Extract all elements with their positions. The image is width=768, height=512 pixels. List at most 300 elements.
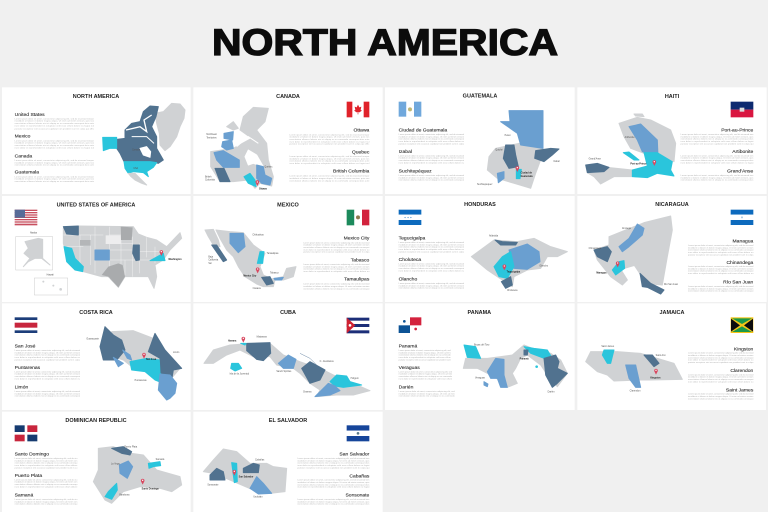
text blocks: irure dolor in reprehenderit in voluptate velit esse cillum dolore eu bbox=[303, 270, 370, 273]
text block: guatemala: incididunt ut labore et dolore magna aliqua. Ut enim ad minim veniam, quis nos bbox=[15, 178, 94, 181]
text block: mexico bbox=[15, 134, 95, 149]
text blocks: irure dolor in reprehenderit in voluptate velit esse cillum dolore eu bbox=[303, 248, 370, 251]
text blocks: irure dolor in reprehenderit in voluptate velit esse cillum dolore eu bbox=[688, 359, 754, 362]
map: cuba: Holguín bbox=[351, 378, 359, 380]
panel: honduras bbox=[385, 196, 575, 302]
text blocks: irure dolor in reprehenderit in voluptate velit esse cillum dolore bbox=[15, 464, 78, 467]
map: nicaragua: Jinotega bbox=[622, 227, 632, 230]
text blocks: incididunt ut labore et dolore magna aliqua. Ut enim ad minim veniam, quis nos bbox=[289, 177, 369, 180]
text block: united states: irure dolor in reprehenderit in voluptate velit esse cillum dolore eu fugiat nul bbox=[15, 124, 95, 127]
map: el salvador: Cabañas bbox=[255, 458, 265, 461]
text blocks: exercitation ullamco laboris nisi ut aliquip ex ea commodo consequat duis aute bbox=[289, 160, 370, 163]
text blocks: pariatur excepteur sint occaecat cupidatat non proident sunt in culpa qui bbox=[297, 466, 370, 469]
map: dominican republic: La Vega bbox=[111, 464, 120, 466]
text blocks: incididunt ut labore et dolore magna aliqua. Ut enim ad minim veniam bbox=[303, 244, 370, 247]
text blocks: incididunt ut labore et dolore magna aliqua. Ut enim ad minim veniam, quis bbox=[297, 500, 369, 503]
text blocks: Lorem ipsum dolor sit amet, consectetur adipiscing elit, sed do eiusmod bbox=[688, 244, 754, 247]
panel: canada bbox=[193, 87, 383, 194]
text blocks: exercitation ullamco laboris nisi ut aliquip ex ea commodo consequat bbox=[303, 287, 370, 290]
text blocks: Lorem ipsum dolor sit amet, consectetur adipiscing elit, sed do eiu bbox=[15, 498, 78, 501]
text block: guatemala: exercitation ullamco laboris nisi ut aliquip ex ea commodo consequat duis aute bbox=[15, 180, 95, 183]
map: usa: Washington bbox=[168, 258, 182, 261]
text blocks: irure dolor in reprehenderit in voluptate velit esse cillum dolore eu bbox=[399, 140, 465, 143]
flag: haiti bbox=[731, 102, 753, 117]
map: costa rica: San José bbox=[146, 359, 157, 361]
map: dominican republic: Samaná bbox=[156, 459, 165, 461]
map: el salvador bbox=[203, 449, 287, 499]
heading: MEXICO bbox=[277, 202, 300, 208]
map: nicaragua: Chinandega bbox=[589, 248, 602, 250]
text blocks: Managua bbox=[733, 238, 754, 244]
panel: dominican republic bbox=[2, 412, 191, 512]
text blocks: exercitation ullamco laboris nisi ut aliquip ex ea commodo bbox=[399, 395, 455, 398]
map: mexico: Sur bbox=[208, 262, 212, 265]
text blocks: pariatur excepteur sint occaecat cupidatat non proident sunt bbox=[399, 358, 451, 361]
text blocks: exercitation ullamco laboris nisi ut aliquip ex ea commodo consequat bbox=[688, 397, 754, 400]
text blocks bbox=[681, 128, 754, 182]
text blocks: Ottawa bbox=[354, 128, 370, 134]
text blocks: incididunt ut labore et dolore magna aliqua. Ut enim ad minim veniam, quis bbox=[681, 176, 753, 179]
map: guatemala: Quiché bbox=[495, 150, 503, 152]
text blocks: irure dolor in reprehenderit in voluptate velit esse cillum dolore eu fugiat bbox=[297, 464, 370, 467]
text blocks: Ciudad de Guatemala bbox=[399, 128, 447, 134]
text blocks: exercitation ullamco laboris nisi ut aliquip ex ea commodo bbox=[399, 375, 453, 378]
text blocks: Lorem ipsum dolor sit amet, consectetur adipiscing elit, sed do eiusmod bbox=[688, 265, 754, 268]
text blocks: incididunt ut labore et dolore magna aliqua. Ut enim ad minim veniam, quis bbox=[681, 135, 753, 138]
text blocks: incididunt ut labore et dolore magna aliqua. Ut enim ad minim veniam bbox=[399, 157, 464, 160]
text blocks: Kingston bbox=[734, 346, 754, 352]
text block: canada: Lorem ipsum dolor sit amet, consectetur adipiscing elit, sed do eiusmod tempor bbox=[15, 159, 94, 162]
map: panama: Darién bbox=[548, 390, 555, 393]
map: north america bbox=[103, 103, 185, 185]
text blocks: incididunt ut labore et dolore magna aliqua. Ut enim ad minim veniam, quis bbox=[297, 459, 369, 462]
text blocks: exercitation ullamco laboris nisi ut aliquip ex ea commodo consequat bbox=[399, 287, 464, 290]
text blocks bbox=[399, 344, 455, 398]
text blocks: Choluteca bbox=[399, 257, 421, 263]
panel: haiti bbox=[577, 87, 767, 194]
heading: JAMAICA bbox=[659, 310, 685, 316]
text blocks: Lorem ipsum dolor sit amet, consectetur adipiscing elit, sed do eiusmod bbox=[688, 393, 754, 396]
text blocks: exercitation ullamco laboris nisi ut aliquip ex ea commodo consequat bbox=[15, 354, 80, 357]
text blocks: exercitation ullamco laboris nisi ut aliquip ex ea commodo consequ bbox=[15, 483, 78, 486]
text blocks: exercitation ullamco laboris nisi ut aliquip ex ea commodo consequat duis aute bbox=[289, 179, 370, 182]
text blocks: incididunt ut labore et dolore magna aliqua. Ut enim ad minim ven bbox=[15, 481, 78, 484]
heading: EL SALVADOR bbox=[269, 418, 307, 424]
text blocks: Lorem ipsum dolor sit amet, consectetur adipiscing elit, sed do eiusmod tempor bbox=[289, 155, 370, 158]
text blocks: pariatur excepteur sint occaecat cupidatat non proident sunt in culpa qui offic bbox=[289, 143, 370, 146]
text blocks: incididunt ut labore et dolore magna aliqua. Ut enim ad mini bbox=[399, 351, 451, 354]
text blocks: Lorem ipsum dolor sit amet, consectetur adipiscing elit, sed do eiusmod bbox=[688, 352, 754, 355]
text blocks: irure dolor in reprehenderit in voluptate velit esse cillum dolore eu bbox=[399, 161, 465, 164]
map: dominican republic: Santo Domingo bbox=[142, 487, 159, 490]
text blocks bbox=[15, 344, 81, 398]
text blocks: Lorem ipsum dolor sit amet, consectetur adipiscing elit, sed do eiusmod tempor bbox=[289, 175, 370, 178]
text blocks: incididunt ut labore et dolore magna aliqua. Ut enim ad mini bbox=[399, 392, 455, 395]
text blocks: exercitation ullamco laboris nisi ut aliquip ex ea commodo consequat bbox=[688, 249, 754, 252]
text blocks: irure dolor in reprehenderit in voluptate velit esse cillum dolore eu fugiat nul bbox=[289, 140, 370, 143]
text blocks: pariatur excepteur sint occaecat cupidatat non proident sunt in culpa bbox=[399, 142, 465, 145]
text blocks bbox=[303, 236, 370, 290]
text blocks: exercitation ullamco laboris nisi ut aliquip ex ea commodo consequat bbox=[399, 179, 464, 182]
text blocks: incididunt ut labore et dolore magna aliqua. Ut enim ad minim veniam, quis nos bbox=[289, 157, 369, 160]
text blocks: Lorem ipsum dolor sit amet, consectetur adipiscing elit, sed do eiusmod bbox=[399, 154, 465, 157]
panel: mexico bbox=[193, 196, 383, 302]
map: canada: Territories bbox=[206, 136, 217, 139]
text blocks: Lorem ipsum dolor sit amet, consectetur adipiscing elit, sed do eiusmod tem bbox=[681, 154, 754, 157]
text blocks: Lorem ipsum dolor sit amet, consectetur adipiscing elit, sed do eiusmod bbox=[399, 262, 465, 265]
text blocks: exercitation ullamco laboris nisi ut aliquip ex ea commodo consequ bbox=[15, 462, 78, 465]
text blocks: Lorem ipsum dolor sit amet, consectetur adipiscing elit, sed do eiusmod bbox=[399, 133, 465, 136]
map: mexico: California bbox=[208, 259, 219, 262]
text block: united states: exercitation ullamco laboris nisi ut aliquip ex ea commodo consequat duis aute bbox=[15, 122, 95, 125]
map: mexico: Oaxaca bbox=[253, 288, 261, 290]
text blocks: incididunt ut labore et dolore magna aliqua. Ut enim ad minim veniam bbox=[399, 243, 464, 246]
text blocks: San José bbox=[15, 344, 36, 350]
map: panama: Veraguas bbox=[475, 377, 486, 380]
text blocks: Samaná bbox=[15, 493, 33, 499]
text blocks: irure dolor in reprehenderit in voluptate velit esse cillum dolore eu fugiat bbox=[681, 161, 754, 164]
text blocks: Lorem ipsum dolor sit amet, consectetur adipiscing elit, sed do eiu bbox=[15, 478, 78, 481]
flag: cuba bbox=[347, 318, 369, 333]
map: mexico: Chihuahua bbox=[252, 235, 264, 237]
text blocks: Saint James bbox=[726, 387, 754, 393]
text blocks: Mexico City bbox=[344, 236, 370, 242]
map: canada: Northwest bbox=[206, 133, 217, 136]
map: nicaragua: Río San Juan bbox=[664, 284, 679, 286]
text blocks: pariatur excepteur sint occaecat cupidatat non proident sunt in culpa bbox=[688, 361, 754, 364]
text blocks: Chinandega bbox=[726, 260, 754, 266]
text blocks: Lorem ipsum dolor sit amet, consectetur adipiscing elit, sed do eiusmod tem bbox=[297, 479, 370, 482]
text blocks: exercitation ullamco laboris nisi ut aliquip ex ea commodo consequat bbox=[303, 268, 370, 271]
text blocks: exercitation ullamco laboris nisi ut aliquip ex ea commodo consequat duis bbox=[681, 159, 753, 162]
text blocks: Puerto Plata bbox=[15, 473, 42, 479]
flag: guatemala bbox=[399, 102, 421, 117]
map: jamaica: Kingston bbox=[650, 376, 661, 379]
text blocks: Lorem ipsum dolor sit amet, consectetur adipiscing elit, sed do eiu bbox=[15, 457, 78, 460]
text blocks: exercitation ullamco laboris nisi ut aliquip ex ea commodo consequat bbox=[688, 270, 754, 273]
text blocks: incididunt ut labore et dolore magna aliqua. Ut enim ad minim veniam bbox=[688, 395, 754, 398]
map: dominican republic: Puerto Plata bbox=[124, 446, 138, 449]
text blocks: incididunt ut labore et dolore magna aliqua. Ut enim ad minim veniam bbox=[688, 354, 754, 357]
text blocks: incididunt ut labore et dolore magna aliqua. Ut enim ad minim veniam bbox=[399, 176, 464, 179]
text blocks: Lorem ipsum dolor sit amet, consectetur adipiscing elit, sed bbox=[399, 370, 453, 373]
map: canada: British bbox=[205, 175, 212, 178]
map: mexico: Mexico City bbox=[243, 275, 257, 278]
map: cuba: Havana bbox=[228, 340, 237, 342]
text blocks bbox=[399, 128, 465, 182]
map: mexico: Tabasco bbox=[270, 272, 279, 274]
map: honduras: Olancho bbox=[539, 265, 549, 267]
panel: nicaragua bbox=[577, 196, 767, 302]
heading: HONDURAS bbox=[464, 202, 496, 208]
text blocks: Artibonite bbox=[732, 149, 754, 155]
text block: guatemala bbox=[15, 170, 95, 183]
text blocks: British Columbia bbox=[333, 169, 370, 175]
text blocks: Tegucigalpa bbox=[399, 236, 425, 242]
text blocks: Lorem ipsum dolor sit amet, consectetur adipiscing elit, sed bbox=[399, 390, 455, 393]
text blocks: exercitation ullamco laboris nisi ut aliquip ex ea commodo consequat duis bbox=[681, 179, 753, 182]
panel: panama bbox=[385, 303, 575, 410]
map: guatemala: Izabal bbox=[553, 161, 560, 163]
text block: united states: pariatur excepteur sint occaecat cupidatat non proident sunt in culpa qui offic bbox=[15, 127, 95, 130]
text blocks: irure dolor in reprehenderit in voluptate velit esse cillum dolore eu bbox=[15, 377, 81, 380]
flag: usa bbox=[15, 210, 37, 225]
heading: PANAMA bbox=[467, 310, 491, 316]
text block: mexico: irure dolor in reprehenderit in voluptate velit esse cillum dolore eu fugiat nul bbox=[15, 146, 95, 149]
text block: canada: Canada bbox=[15, 153, 32, 159]
map: usa bbox=[63, 226, 182, 288]
text blocks: exercitation ullamco laboris nisi ut aliquip ex ea commodo consequat bbox=[399, 138, 464, 141]
text blocks: Santo Domingo bbox=[15, 452, 49, 458]
text blocks: exercitation ullamco laboris nisi ut aliquip ex ea commodo consequat bbox=[15, 395, 80, 398]
text blocks: Río San Juan bbox=[723, 279, 754, 285]
text block: mexico: Lorem ipsum dolor sit amet, consectetur adipiscing elit, sed do eiusmod tempor bbox=[15, 139, 94, 142]
map: el salvador: San Salvador bbox=[239, 476, 254, 478]
map: honduras bbox=[471, 234, 567, 292]
text blocks: incididunt ut labore et dolore magna aliqua. Ut enim ad minim ven bbox=[15, 500, 78, 503]
text blocks: incididunt ut labore et dolore magna aliqua. Ut enim ad minim veniam bbox=[15, 392, 80, 395]
map: north america: Canada bbox=[132, 150, 141, 152]
panel: north america bbox=[2, 87, 191, 194]
flag: honduras bbox=[399, 210, 421, 225]
map: panama: Bocas del Toro bbox=[474, 343, 490, 346]
text blocks: irure dolor in reprehenderit in voluptate velit esse cillum dolore eu bbox=[688, 380, 754, 383]
text blocks bbox=[399, 236, 465, 290]
map: nicaragua bbox=[589, 216, 679, 294]
text blocks: exercitation ullamco laboris nisi ut aliquip ex ea commodo bbox=[399, 354, 451, 357]
text blocks: Lorem ipsum dolor sit amet, consectetur adipiscing elit, sed do eiusmod bbox=[303, 263, 370, 266]
text blocks: Lorem ipsum dolor sit amet, consectetur adipiscing elit, sed do eiusmod bbox=[688, 373, 754, 376]
text block: united states: Lorem ipsum dolor sit amet, consectetur adipiscing elit, sed do eiusmod tempor bbox=[15, 117, 94, 120]
text blocks: Lorem ipsum dolor sit amet, consectetur adipiscing elit, sed do eiusmod bbox=[15, 370, 81, 373]
heading: HAITI bbox=[665, 94, 680, 100]
flag: mexico bbox=[347, 210, 369, 225]
text blocks: incididunt ut labore et dolore magna aliqua. Ut enim ad minim veniam bbox=[15, 373, 80, 376]
map: guatemala: Guatemala bbox=[521, 175, 533, 178]
text blocks: Lorem ipsum dolor sit amet, consectetur adipiscing elit, sed do eiusmod tempor bbox=[289, 133, 370, 136]
map: costa rica: Puntarenas bbox=[135, 379, 147, 382]
text blocks bbox=[297, 452, 370, 506]
panel: cuba bbox=[193, 303, 383, 410]
panel: costa rica bbox=[2, 303, 191, 410]
text blocks: irure dolor in reprehenderit in voluptate velit esse cillum dolore eu fugiat nul bbox=[289, 162, 370, 165]
map: honduras: Choluteca bbox=[507, 289, 518, 292]
map: dominican republic bbox=[93, 446, 182, 503]
text blocks: Clarendon bbox=[730, 368, 754, 374]
text block: canada: incididunt ut labore et dolore magna aliqua. Ut enim ad minim veniam, quis nos bbox=[15, 161, 94, 164]
map: guatemala: Suchitepéquez bbox=[477, 183, 493, 186]
text blocks: Sonsonate bbox=[345, 493, 370, 499]
text blocks: incididunt ut labore et dolore magna aliqua. Ut enim ad minim veniam bbox=[688, 246, 754, 249]
text blocks: exercitation ullamco laboris nisi ut aliquip ex ea commodo consequat duis bbox=[297, 462, 369, 465]
text blocks: pariatur excepteur sint occaecat cupidatat non proident sunt in culpa bbox=[303, 251, 370, 254]
map: cuba: Granma bbox=[303, 391, 312, 394]
text blocks: incididunt ut labore et dolore magna aliqua. Ut enim ad minim veniam bbox=[303, 265, 370, 268]
text blocks bbox=[15, 452, 78, 506]
map: panama bbox=[463, 343, 567, 393]
text blocks: Limón bbox=[15, 385, 28, 391]
text blocks: Cabañas bbox=[349, 473, 370, 479]
map: jamaica: Clarendon bbox=[630, 389, 641, 392]
heading: CUBA bbox=[280, 310, 296, 316]
map: mexico: Tamaulipas bbox=[267, 253, 279, 255]
text blocks: irure dolor in reprehenderit in voluptate velit esse cillum bbox=[399, 377, 452, 380]
text blocks: exercitation ullamco laboris nisi ut aliquip ex ea commodo consequat bbox=[399, 246, 464, 249]
text blocks: exercitation ullamco laboris nisi ut aliquip ex ea commodo consequat duis bbox=[297, 483, 369, 486]
text blocks: incididunt ut labore et dolore magna aliqua. Ut enim ad minim veniam bbox=[399, 265, 464, 268]
text blocks: irure dolor in reprehenderit in voluptate velit esse cillum dolore eu bbox=[15, 356, 81, 359]
text blocks: exercitation ullamco laboris nisi ut aliquip ex ea commodo consequat bbox=[303, 246, 370, 249]
text blocks: Olancho bbox=[399, 277, 417, 283]
flag: el salvador bbox=[347, 425, 369, 441]
text blocks: pariatur excepteur sint occaecat cupidatat non proident sunt in culpa bbox=[688, 253, 754, 256]
heading: NORTH AMERICA bbox=[73, 94, 119, 100]
text blocks: incididunt ut labore et dolore magna aliqua. Ut enim ad minim ven bbox=[15, 459, 78, 462]
map: haiti: Artibonite bbox=[625, 136, 635, 139]
text block: united states: United States bbox=[15, 112, 45, 118]
map: haiti: Grand'Anse bbox=[589, 157, 602, 160]
text blocks: Tabasco bbox=[351, 257, 370, 263]
map: cuba bbox=[204, 335, 370, 397]
text blocks: incididunt ut labore et dolore magna aliqua. Ut enim ad minim veniam bbox=[399, 284, 464, 287]
panel: el salvador bbox=[193, 412, 383, 512]
text blocks: Puntarenas bbox=[15, 365, 41, 371]
text block: united states bbox=[15, 112, 95, 130]
text blocks: Izabal bbox=[399, 149, 412, 155]
map: panama: Panamá bbox=[520, 358, 529, 360]
text blocks: exercitation ullamco laboris nisi ut aliquip ex ea commodo consequat duis bbox=[681, 138, 753, 141]
text blocks: incididunt ut labore et dolore magna aliqua. Ut enim ad minim veniam, quis bbox=[297, 481, 369, 484]
text blocks: irure dolor in reprehenderit in voluptate velit esse cillum dolore eu bbox=[399, 269, 465, 272]
text blocks: exercitation ullamco laboris nisi ut aliquip ex ea commodo consequat bbox=[399, 267, 464, 270]
text blocks: irure dolor in reprehenderit in voluptate velit esse cillum bbox=[399, 356, 451, 359]
text blocks: irure dolor in reprehenderit in voluptate velit esse cillum dolore eu bbox=[399, 248, 465, 251]
text blocks: irure dolor in reprehenderit in voluptate velit esse cillum dolore eu fugiat bbox=[681, 140, 754, 143]
map: cuba: Isla de la Juventud bbox=[230, 372, 250, 375]
map: guatemala: Petén bbox=[505, 134, 511, 137]
map: nicaragua: Managua bbox=[596, 272, 607, 274]
map: mexico bbox=[205, 229, 296, 290]
map: costa rica bbox=[86, 327, 182, 400]
text blocks: Lorem ipsum dolor sit amet, consectetur adipiscing elit, sed do eiusmod tem bbox=[297, 498, 370, 501]
text blocks: Port-au-Prince bbox=[721, 128, 754, 134]
map: el salvador: Sonsonate bbox=[207, 483, 219, 486]
text blocks: irure dolor in reprehenderit in voluptate velit esse cillum dolore bbox=[15, 485, 78, 488]
heading: GUATEMALA bbox=[463, 94, 497, 100]
flag: canada bbox=[347, 102, 369, 117]
flag: jamaica bbox=[731, 317, 753, 333]
text blocks: Lorem ipsum dolor sit amet, consectetur adipiscing elit, sed do eiusmod bbox=[399, 282, 465, 285]
inset: hawaii bbox=[34, 275, 68, 295]
text block: mexico: incididunt ut labore et dolore magna aliqua. Ut enim ad minim veniam, quis nos bbox=[15, 142, 94, 145]
text blocks: pariatur excepteur sint occaecat cupidatat non proident sunt in cu bbox=[15, 466, 78, 469]
map: canada: Ottawa bbox=[259, 187, 267, 190]
map: mexico: Baja bbox=[208, 256, 214, 258]
text block: united states: incididunt ut labore et dolore magna aliqua. Ut enim ad minim veniam, quis nos bbox=[15, 120, 94, 123]
flag: dominican republic bbox=[15, 425, 37, 441]
map: canada: Quebec bbox=[264, 166, 273, 168]
text blocks: exercitation ullamco laboris nisi ut aliquip ex ea commodo consequat bbox=[15, 375, 80, 378]
heading: DOMINICAN REPUBLIC bbox=[65, 418, 127, 424]
flag: nicaragua bbox=[731, 210, 753, 225]
map: canada bbox=[205, 107, 273, 190]
text block: guatemala: Lorem ipsum dolor sit amet, consectetur adipiscing elit, sed do eiusmod tempor bbox=[15, 175, 94, 178]
text blocks: Lorem ipsum dolor sit amet, consectetur adipiscing elit, sed do eiusmod bbox=[15, 390, 81, 393]
map: honduras: Tegucigalpa bbox=[507, 271, 521, 273]
text blocks: Tamaulipas bbox=[344, 277, 370, 283]
text blocks: exercitation ullamco laboris nisi ut aliquip ex ea commodo consequat bbox=[688, 378, 754, 381]
text blocks: incididunt ut labore et dolore magna aliqua. Ut enim ad minim veniam bbox=[688, 267, 754, 270]
heading: COSTA RICA bbox=[79, 310, 113, 316]
map: jamaica bbox=[586, 345, 682, 392]
text blocks: Lorem ipsum dolor sit amet, consectetur adipiscing elit, sed do eiusmod tem bbox=[681, 174, 754, 177]
text blocks: San Salvador bbox=[339, 452, 370, 458]
map: cuba: C. Jovellanos bbox=[320, 361, 334, 363]
text blocks: Lorem ipsum dolor sit amet, consectetur adipiscing elit, sed do eiusmod bbox=[688, 285, 754, 288]
text blocks: incididunt ut labore et dolore magna aliqua. Ut enim ad mini bbox=[399, 373, 453, 376]
text blocks: exercitation ullamco laboris nisi ut aliquip ex ea commodo consequ bbox=[15, 503, 78, 506]
text blocks: incididunt ut labore et dolore magna aliqua. Ut enim ad minim veniam bbox=[303, 285, 370, 288]
panel: guatemala bbox=[385, 87, 575, 194]
heading: CANADA bbox=[276, 94, 300, 100]
text blocks: Lorem ipsum dolor sit amet, consectetur adipiscing elit, sed do eiusmod bbox=[399, 241, 465, 244]
map: honduras: Atlántida bbox=[489, 234, 499, 237]
map: guatemala bbox=[477, 111, 560, 188]
text blocks: Lorem ipsum dolor sit amet, consectetur adipiscing elit, sed do eiusmod tem bbox=[297, 457, 370, 460]
map: costa rica: Guanacaste bbox=[86, 338, 100, 341]
text blocks: Darién bbox=[399, 385, 414, 391]
text blocks bbox=[688, 346, 754, 400]
map: cuba: Matanzas bbox=[257, 335, 268, 338]
text blocks: incididunt ut labore et dolore magna aliqua. Ut enim ad minim veniam bbox=[399, 135, 464, 138]
text blocks: Lorem ipsum dolor sit amet, consectetur adipiscing elit, sed do eiusmod bbox=[303, 241, 370, 244]
text blocks: Suchitepéquez bbox=[399, 169, 432, 175]
text blocks: exercitation ullamco laboris nisi ut aliquip ex ea commodo consequat bbox=[688, 290, 754, 293]
text blocks: irure dolor in reprehenderit in voluptate velit esse cillum dolore eu fugiat bbox=[297, 486, 370, 489]
text blocks: pariatur excepteur sint occaecat cupidatat non proident sunt in culpa bbox=[15, 358, 81, 361]
text blocks: Lorem ipsum dolor sit amet, consectetur adipiscing elit, sed do eiusmod bbox=[399, 174, 465, 177]
text block: canada bbox=[15, 153, 95, 167]
text block: mexico: exercitation ullamco laboris nisi ut aliquip ex ea commodo consequat duis aute bbox=[15, 144, 95, 147]
flag: honduras: ✦ ✦ ✦ bbox=[404, 215, 413, 219]
text blocks: Panamá bbox=[399, 344, 417, 350]
map: canada: Columbia bbox=[205, 180, 216, 182]
map: haiti bbox=[586, 114, 676, 184]
text blocks: exercitation ullamco laboris nisi ut aliquip ex ea commodo consequat duis aute bbox=[289, 138, 370, 141]
inset: alaska: Alaska bbox=[30, 232, 38, 235]
map: costa rica: Limón bbox=[173, 352, 180, 354]
text blocks: irure dolor in reprehenderit in voluptate velit esse cillum dolore eu bbox=[688, 251, 754, 254]
text blocks: Veraguas bbox=[399, 365, 420, 371]
map: guatemala: Ciudad de bbox=[521, 173, 533, 175]
inset: hawaii: Hawaii bbox=[47, 275, 54, 277]
text blocks: exercitation ullamco laboris nisi ut aliquip ex ea commodo consequat bbox=[399, 159, 464, 162]
panel: united states of america bbox=[2, 196, 191, 302]
title: NORTH AMERICA bbox=[212, 22, 558, 63]
map: north america: USA bbox=[133, 167, 139, 170]
map: jamaica: Saint Ann bbox=[656, 354, 666, 357]
text blocks: pariatur excepteur sint occaecat cupidatat non proident sunt in culpa bbox=[399, 250, 465, 253]
text blocks: incididunt ut labore et dolore magna aliqua. Ut enim ad minim veniam bbox=[688, 376, 754, 379]
text blocks: incididunt ut labore et dolore magna aliqua. Ut enim ad minim veniam, quis bbox=[681, 157, 753, 160]
text blocks: pariatur excepteur sint occaecat cupidatat non proident sunt in culpa qui bbox=[681, 142, 754, 145]
map: dominican republic: Barahona bbox=[119, 494, 130, 497]
map: haiti: Port-au-Prince bbox=[630, 163, 647, 166]
text blocks: irure dolor in reprehenderit in voluptate velit esse cillum dolore eu bbox=[688, 272, 754, 275]
text blocks: Grand'Anse bbox=[727, 169, 754, 175]
heading: NICARAGUA bbox=[655, 202, 689, 208]
text blocks: Lorem ipsum dolor sit amet, consectetur adipiscing elit, sed do eiusmod tem bbox=[681, 133, 754, 136]
